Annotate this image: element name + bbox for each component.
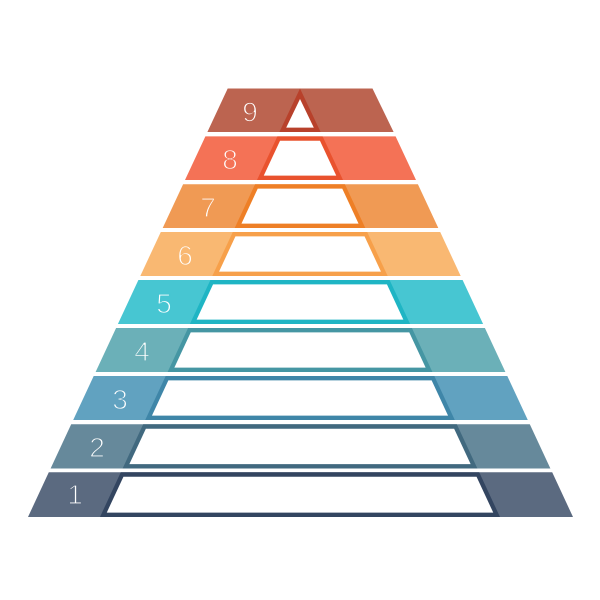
band 7 [163,184,438,228]
blank slot 4 [174,332,426,368]
level 2 [51,424,550,468]
number 6: 6 [177,240,193,271]
blank slot 3 [152,380,448,416]
frame 6 [212,232,388,276]
level 5 [118,280,483,324]
band 3 [73,376,528,420]
blank slot 5 [197,284,403,320]
blank slot 1 [107,477,493,513]
band 2 [51,424,550,468]
level 9 [207,88,394,132]
frame 5 [190,280,410,324]
blank slot 6 [219,236,381,272]
frame 2 [123,424,477,468]
frame 4 [168,328,432,372]
level 4 [96,328,505,372]
level 6 [140,232,461,276]
blank slot 8 [264,141,336,176]
frame 9 [279,88,321,132]
number 3: 3 [112,384,128,415]
blank slot 7 [241,189,359,224]
number 5: 5 [156,288,172,319]
frame 3 [145,376,455,420]
band 6 [140,232,461,276]
level 1 [28,472,573,517]
number 1: 1 [67,479,83,510]
blank slot 9 [286,99,314,128]
band 8 [185,136,416,180]
blank slot 2 [129,429,471,464]
band 1 [28,472,573,517]
frame 1 [100,472,500,517]
band 5 [118,280,483,324]
number 8: 8 [222,144,238,175]
level 7 [163,184,438,228]
number 4: 4 [134,336,150,367]
frame 7 [235,184,365,228]
level 8 [185,136,416,180]
band 9 [207,88,394,132]
number 2: 2 [89,432,105,463]
band 4 [96,328,505,372]
level 3 [73,376,528,420]
number 9: 9 [242,96,258,128]
frame 8 [257,136,343,180]
number 7: 7 [200,192,216,223]
